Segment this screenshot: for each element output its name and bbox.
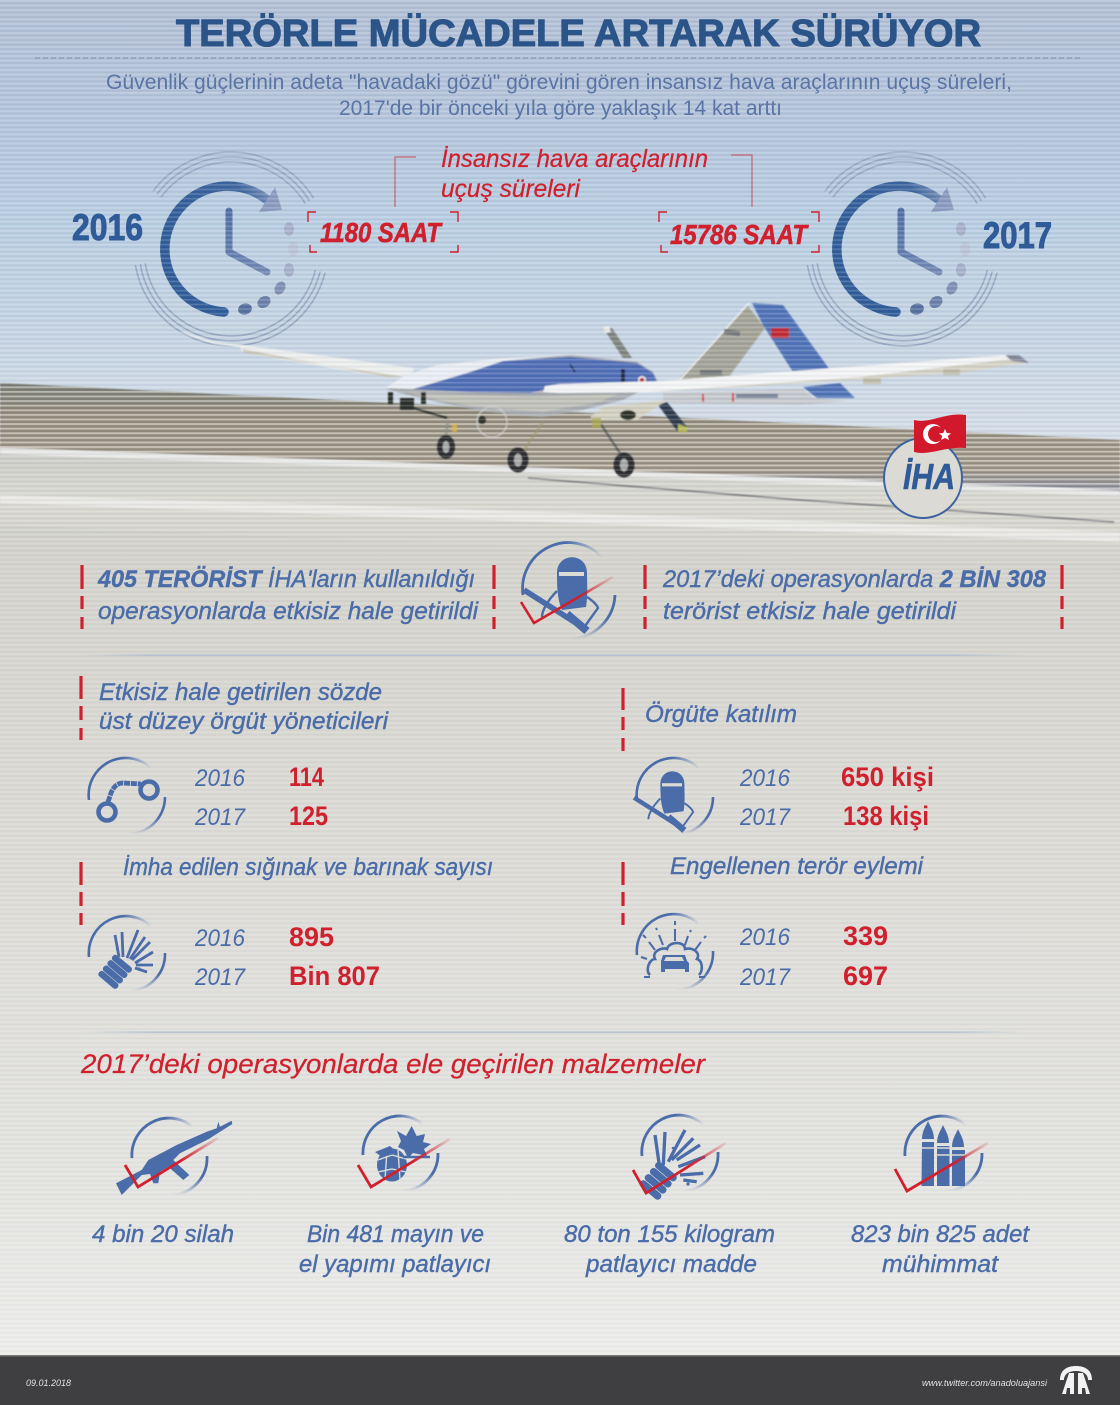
badge: İHA with Turkish flag [884,415,966,518]
heading: senior leaders [99,679,389,735]
icon: explosive [89,916,165,991]
item: mines and explosives [299,1116,491,1278]
panel: joining the organization [623,688,934,834]
data: leaders: 125 [289,801,328,831]
icon: militant [634,758,713,834]
data: prevented: 2017 [739,964,792,991]
icon: AA logo [1060,1366,1092,1394]
value: 1180 saat [308,212,458,252]
badge: İHA with Turkish flag: İHA [903,456,955,497]
data: shelters [194,922,380,991]
stat left: 405 terrorists [82,565,494,629]
icon: bullets [895,1116,988,1191]
stat right: 2 bin 308: 2017’deki operasyonlarda 2 BİN 308 [662,566,1047,593]
heading: senior leaders: üst düzey örgüt yöneticileri [99,708,389,735]
label: ammunition: mühimmat [882,1251,999,1278]
label: explosive material [564,1221,775,1278]
icon: clock 2016 [135,152,325,346]
value: 15786 saat [659,212,819,252]
item: rifles [92,1118,234,1248]
data: shelters: Bin 807 [289,961,380,991]
data: leaders: 2016 [194,765,246,792]
heading: senior leaders: Etkisiz hale getirilen sözde [99,679,382,706]
year label 2017: 2017 [983,215,1052,256]
red heading: flight durations: uçuş süreleri [441,175,581,203]
data: leaders: 114 [289,762,324,792]
data: joining: 650 kişi [841,762,934,792]
panel: destroyed shelters [81,854,493,991]
data: shelters: 2016 [194,925,246,952]
data: leaders [194,762,328,831]
stat right: 2 bin 308: terörist etkisiz hale getirildi [663,598,957,625]
title: TERÖRLE MÜCADELE ARTARAK SÜRÜYOR [176,12,981,55]
panel: prevented attacks [623,853,924,991]
label: ammunition [851,1221,1030,1278]
heading: joining: Örgüte katılım [645,701,797,728]
icon: handcuffs [89,758,165,834]
heading: seized materials: 2017’deki operasyonlarda ele geçirilen malzemeler [80,1049,706,1079]
value: 15786 saat: 15786 SAAT [670,219,809,250]
data: prevented: 697 [843,961,888,991]
data: prevented [739,921,888,991]
item: explosive material [564,1115,775,1278]
subtitle [106,71,1012,120]
red heading: flight durations [395,145,752,207]
data: prevented: 2016 [739,924,791,951]
item: ammunition [851,1116,1030,1278]
label: mines [299,1221,491,1278]
data: shelters: 2017 [194,964,247,991]
stat left: 405 terrorists: operasyonlarda etkisiz hale getirildi [98,598,479,625]
icon: neutralized terrorist [521,543,615,639]
heading: shelters: İmha edilen sığınak ve barınak sayısı [123,854,493,881]
subtitle: Güvenlik güçlerinin adeta "havadaki gözü" görevini gören insansız hava araçlarının uçuş süreleri, [106,71,1012,94]
label: explosive material: 80 ton 155 kilogram [564,1221,775,1248]
data: joining: 138 kişi [843,801,929,831]
data: joining [739,762,934,831]
icon: explosive blast [633,1115,726,1201]
icon: car bomb [637,914,713,990]
stat right: 2 bin 308 [645,565,1062,629]
label: mines: el yapımı patlayıcı [299,1251,491,1278]
icon: rifle [116,1118,232,1195]
label: ammunition: 823 bin 825 adet [851,1221,1030,1248]
footer bar: 09.01.2018 [26,1378,72,1389]
footer bar [0,1355,1120,1405]
red heading: flight durations: İnsansız hava araçlarının [441,145,708,173]
footer bar: www.twitter.com/anadoluajansi [922,1378,1048,1389]
icon: grenade [358,1116,450,1191]
drone photo illustration [179,303,1029,478]
value: 1180 saat: 1180 SAAT [320,217,443,248]
icon: clock 2017 [807,152,997,346]
data: joining: 2017 [739,804,792,831]
data: leaders: 2017 [194,804,247,831]
stat left: 405 terrorists: 405 TERÖRİST İHA'ların kullanıldığı [97,566,475,593]
heading: prevented: Engellenen terör eylemi [670,853,924,880]
label: mines: Bin 481 mayın ve [307,1221,484,1248]
panel: senior leaders [81,676,389,834]
label: rifles: 4 bin 20 silah [92,1221,234,1248]
data: joining: 2016 [739,765,791,792]
data: prevented: 339 [843,921,888,951]
year label 2016: 2016 [72,207,143,248]
data: shelters: 895 [289,922,334,952]
label: explosive material: patlayıcı madde [585,1251,757,1278]
subtitle: 2017'de bir önceki yıla göre yaklaşık 14 kat arttı [339,97,782,120]
